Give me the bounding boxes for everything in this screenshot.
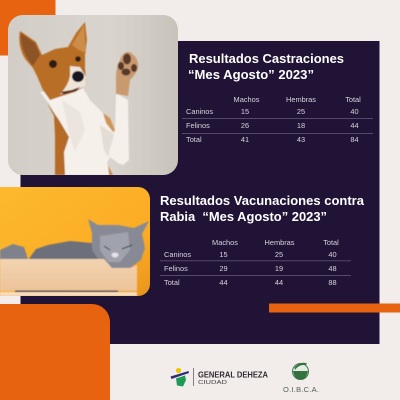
heading: vacunaciones: Resultados Vacunaciones contra bbox=[160, 194, 365, 208]
table: vacunaciones: 29 bbox=[219, 264, 228, 273]
table: castraciones: 15 bbox=[241, 107, 249, 116]
table: vacunaciones: 15 bbox=[219, 250, 228, 259]
table: vacunaciones: 44 bbox=[219, 278, 228, 287]
heading: castraciones bbox=[188, 52, 344, 82]
table: vacunaciones: Total bbox=[323, 238, 339, 247]
logo: O.I.B.C.A.: O.I.B.C.A. bbox=[283, 385, 319, 394]
table: vacunaciones bbox=[160, 238, 351, 287]
table: castraciones: Felinos bbox=[186, 121, 210, 130]
table: vacunaciones: Hembras bbox=[265, 238, 295, 247]
table: castraciones: Total bbox=[186, 135, 202, 144]
heading: vacunaciones bbox=[160, 194, 365, 224]
logo: General Deheza Ciudad: CIUDAD bbox=[198, 380, 227, 386]
table: vacunaciones: 48 bbox=[328, 264, 337, 273]
table: castraciones: Machos bbox=[234, 95, 260, 104]
heading: vacunaciones: Rabia “Mes Agosto” 2023” bbox=[160, 210, 327, 224]
table: castraciones: 26 bbox=[241, 121, 249, 130]
dark panel bbox=[20, 41, 380, 344]
table: vacunaciones: 25 bbox=[275, 250, 283, 259]
heading: castraciones: Resultados Castraciones bbox=[189, 52, 344, 66]
table: vacunaciones: 19 bbox=[275, 264, 283, 273]
logo: General Deheza Ciudad: GENERAL DEHEZA bbox=[198, 370, 268, 380]
orange corner block top left bbox=[0, 0, 56, 56]
table: vacunaciones: 44 bbox=[275, 278, 283, 287]
table: castraciones: 41 bbox=[241, 135, 249, 144]
table: vacunaciones: 88 bbox=[328, 278, 337, 287]
photo: dog raising paw bbox=[8, 15, 178, 175]
heading: castraciones: “Mes Agosto” 2023” bbox=[188, 68, 314, 82]
orange block bottom left bbox=[0, 304, 110, 400]
table: castraciones: 84 bbox=[350, 135, 359, 144]
logo: General Deheza Ciudad bbox=[170, 368, 268, 386]
table: vacunaciones: Felinos bbox=[164, 264, 188, 273]
table: vacunaciones: 40 bbox=[328, 250, 337, 259]
table: vacunaciones: Caninos bbox=[164, 250, 191, 259]
table: vacunaciones: Total bbox=[164, 278, 180, 287]
table: castraciones: 43 bbox=[297, 135, 305, 144]
photo: cat sleeping in crate bbox=[0, 187, 150, 296]
table: castraciones: 25 bbox=[297, 107, 305, 116]
table: castraciones: Caninos bbox=[186, 107, 213, 116]
table: castraciones: 40 bbox=[350, 107, 359, 116]
table: castraciones: Hembras bbox=[286, 95, 316, 104]
table: castraciones: 18 bbox=[297, 121, 305, 130]
table: castraciones bbox=[182, 95, 373, 144]
table: vacunaciones: Machos bbox=[212, 238, 238, 247]
table: castraciones: 44 bbox=[350, 121, 359, 130]
orange bar right bbox=[269, 304, 400, 312]
logo: O.I.B.C.A. bbox=[283, 363, 319, 394]
table: castraciones: Total bbox=[345, 95, 361, 104]
